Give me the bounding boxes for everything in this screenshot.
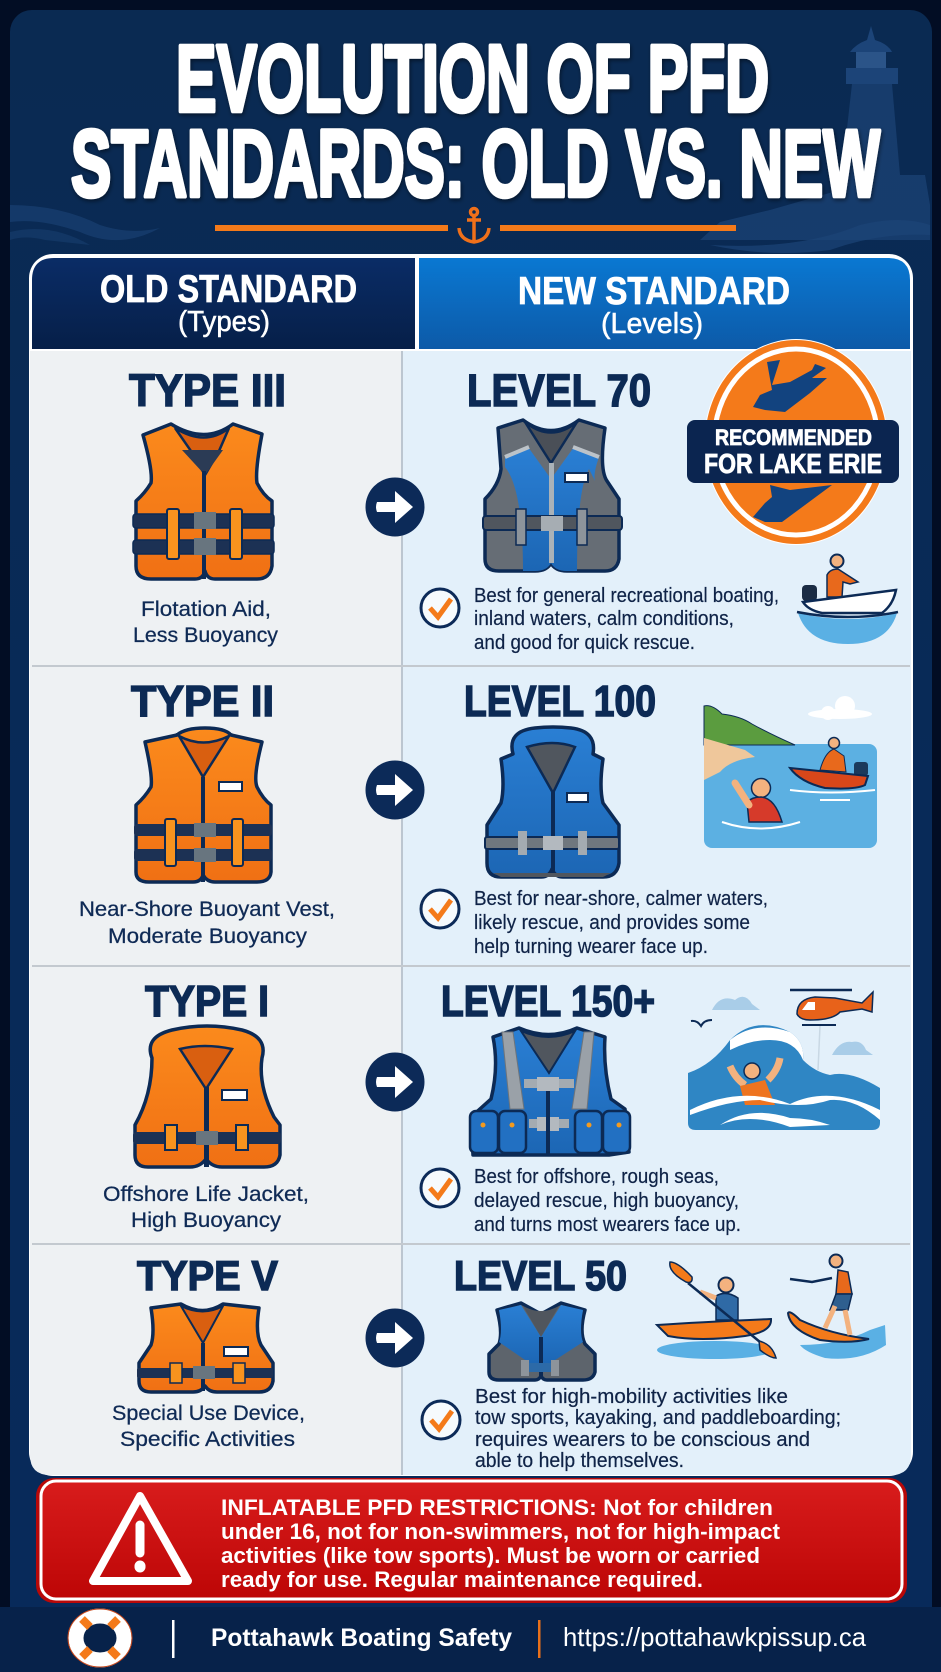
alert text — [221, 1495, 780, 1592]
icon: warning triangle — [93, 1496, 188, 1581]
icon: compact blue vest — [489, 1303, 595, 1380]
description: help turning wearer face up. — [474, 935, 708, 958]
row 4 old: type V — [112, 1252, 305, 1451]
scene: person in rough waves with helicopter — [688, 990, 880, 1130]
title divider with anchor — [215, 208, 736, 242]
column header: old standard: OLD STANDARD — [100, 268, 357, 311]
description: Special Use Device, — [112, 1402, 305, 1425]
row 2 new: level 100 — [421, 677, 877, 958]
row 3 new: level 150+ — [421, 977, 880, 1236]
banner — [687, 420, 899, 483]
icon: anchor — [459, 208, 489, 242]
icon: life ring — [68, 1609, 132, 1667]
description — [474, 887, 768, 958]
icon: blue vest with pockets — [470, 1028, 630, 1155]
description — [475, 1386, 841, 1472]
heading: LEVEL 150+ — [441, 977, 655, 1026]
description: inland waters, calm conditions, — [474, 607, 734, 630]
arrow 2 — [366, 760, 424, 820]
arrow 4 — [366, 1308, 424, 1368]
icon: check — [421, 1169, 459, 1207]
heading: LEVEL 70 — [467, 365, 651, 416]
row 1 new: level 70 — [421, 339, 899, 654]
icon: blue and grey vest — [483, 420, 622, 571]
description: Offshore Life Jacket, — [103, 1183, 309, 1206]
badge: recommended for Lake Erie — [687, 339, 899, 545]
description: Best for offshore, rough seas, — [474, 1165, 719, 1188]
column header: new standard: NEW STANDARD — [518, 270, 790, 313]
alert text: INFLATABLE PFD RESTRICTIONS: Not for children — [221, 1495, 773, 1520]
scene: swimmer and rescue boat near shore — [704, 696, 877, 848]
arrow 1 — [366, 478, 424, 536]
column header: new standard: (Levels) — [601, 308, 703, 340]
heading: TYPE II — [131, 677, 274, 726]
row 3 old: type I — [103, 977, 309, 1232]
heading: LEVEL 100 — [464, 677, 656, 726]
heading: TYPE V — [137, 1252, 278, 1299]
description: Flotation Aid, — [141, 598, 271, 621]
description: delayed rescue, high buoyancy, — [474, 1189, 739, 1212]
icon: kayaker — [657, 1262, 776, 1359]
heading: TYPE III — [129, 365, 286, 416]
icon: orange vest — [134, 728, 272, 882]
row 2 old: type II — [79, 677, 335, 948]
description: Moderate Buoyancy — [108, 925, 308, 948]
brand name: Pottahawk Boating Safety — [211, 1624, 512, 1652]
row 4 new: level 50 — [422, 1252, 886, 1472]
description: and turns most wearers face up. — [474, 1213, 741, 1236]
badge: recommended for Lake Erie: RECOMMENDED — [715, 425, 872, 450]
icon: lake map top — [753, 360, 827, 412]
alert text: activities (like tow sports). Must be worn or carried — [221, 1543, 760, 1568]
description: Best for general recreational boating, — [474, 584, 779, 607]
old column background — [30, 351, 401, 1475]
alert text: under 16, not for non-swimmers, not for high-impact — [221, 1519, 780, 1544]
icon: orange collar vest — [133, 1026, 281, 1167]
website url: https://pottahawkpissup.ca — [563, 1622, 867, 1652]
icon: paddleboarder — [788, 1254, 886, 1359]
lighthouse and waves backdrop — [10, 26, 930, 253]
description — [79, 898, 335, 948]
description: likely rescue, and provides some — [474, 911, 750, 934]
icon: check — [422, 1401, 460, 1439]
icon: low-profile orange vest — [137, 1304, 273, 1392]
icon: orange vest — [133, 424, 274, 579]
badge: recommended for Lake Erie: FOR LAKE ERIE — [704, 448, 882, 479]
icon: person in motorboat — [797, 554, 898, 644]
footer — [68, 1609, 867, 1667]
description: Less Buoyancy — [133, 624, 279, 647]
description: Best for near-shore, calmer waters, — [474, 887, 768, 910]
heading: TYPE I — [145, 977, 269, 1026]
description — [133, 598, 279, 647]
description — [474, 1165, 741, 1236]
icon: lake map bottom — [753, 485, 832, 522]
column header: old standard — [32, 258, 415, 349]
icon: helicopter — [790, 990, 873, 1025]
description: requires wearers to be conscious and — [475, 1429, 810, 1451]
icon: blue vest with collar — [485, 727, 619, 877]
row 1 old: type III — [129, 365, 286, 647]
description: Specific Activities — [120, 1428, 295, 1451]
description: and good for quick rescue. — [474, 631, 695, 654]
icon: check — [421, 890, 459, 928]
arrow 3 — [366, 1052, 424, 1112]
heading: LEVEL 50 — [454, 1252, 627, 1299]
column header: old standard: (Types) — [178, 306, 270, 338]
description — [103, 1183, 309, 1232]
description: tow sports, kayaking, and paddleboarding; — [475, 1407, 841, 1429]
description: able to help themselves. — [475, 1450, 684, 1472]
alert panel: inflatable restrictions — [36, 1478, 907, 1603]
column header: new standard — [419, 258, 910, 349]
description: Best for high-mobility activities like — [475, 1386, 788, 1408]
new column background — [403, 351, 911, 1475]
description — [112, 1402, 305, 1451]
title — [71, 26, 880, 217]
alert text: ready for use. Regular maintenance required. — [221, 1567, 703, 1592]
icon: check — [421, 589, 459, 627]
comparison table — [29, 254, 913, 1476]
description: Near-Shore Buoyant Vest, — [79, 898, 335, 921]
description — [474, 584, 779, 654]
description: High Buoyancy — [131, 1209, 282, 1232]
